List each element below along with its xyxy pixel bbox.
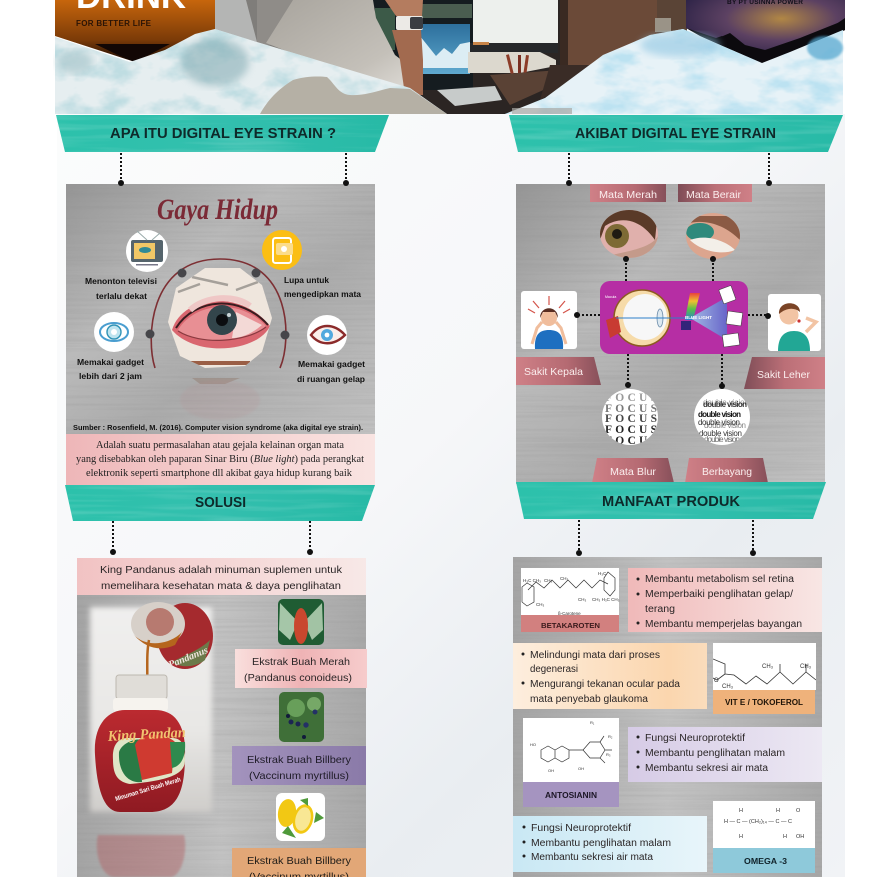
intro text box	[77, 558, 366, 595]
card: vitamin e: CH₃	[800, 664, 812, 670]
heading banner: manfaat produk	[516, 482, 826, 519]
left sea wave	[55, 29, 447, 114]
list: vitamin e benefits: Mengurangi tekanan ocular pada	[530, 679, 680, 690]
list: omega-3 benefits: Fungsi Neuroprotektif	[531, 823, 631, 834]
image: watery eye closeup	[686, 213, 740, 259]
lifestyle labels: di ruangan gelap	[297, 375, 365, 384]
card: omega-3: H	[739, 808, 743, 814]
image: focus chart: FOCUS	[605, 403, 657, 415]
image: focus chart: FOCUS	[605, 413, 657, 425]
card: headache	[521, 291, 577, 349]
definition text box: elektronik seperti smartphone dll akibat gaya hidup kurang baik	[86, 468, 353, 479]
list: omega-3 benefits	[513, 816, 707, 872]
image: double vision	[694, 389, 750, 445]
panel: manfaat produk	[513, 557, 822, 877]
list: betakaroten benefits	[628, 568, 822, 632]
lifestyle labels: Lupa untuk	[284, 276, 330, 285]
list: betakaroten benefits: terang	[645, 604, 675, 615]
card: betakaroten: CH₃ H₃C CH₃	[592, 597, 620, 602]
right starry badge	[686, 0, 845, 64]
left logo badge	[55, 0, 215, 62]
card: omega-3: H — C — (CH₂)₁₄ — C — C	[724, 819, 792, 825]
card: antosianin: R₃	[606, 752, 611, 757]
product photo: bottle pouring: Pandanus	[167, 645, 210, 671]
definition text box: Adalah suatu permasalahan atau gejala kelainan organ mata	[96, 440, 344, 451]
label: ekstrak buah merah	[235, 649, 367, 688]
product photo: bottle pouring: King Pandan	[106, 725, 186, 745]
lifestyle labels: Menonton televisi	[85, 277, 157, 286]
card: omega-3: H	[776, 808, 780, 814]
label: ekstrak buah billbery orange	[232, 848, 366, 877]
image: double vision: double vision	[704, 435, 740, 444]
icon: red eye	[307, 315, 347, 355]
card: antosianin: ANTOSIANIN	[545, 791, 597, 800]
image: focus chart: FOCUS	[605, 424, 657, 436]
heading banner: apa itu digital eye strain: APA ITU DIGITAL EYE STRAIN ?	[110, 126, 336, 142]
arc with nodes	[146, 259, 290, 368]
header photo banner	[55, 0, 845, 114]
diagram: eye and blue light: BLUE LIGHT	[685, 315, 712, 320]
list: omega-3 benefits: Membantu penglihatan malam	[531, 838, 671, 849]
label: berbayang: Berbayang	[702, 467, 752, 478]
label: mata blur: Mata Blur	[610, 467, 657, 478]
image: focus chart: FOCUS	[605, 392, 657, 404]
lifestyle labels: mengedipkan mata	[284, 290, 362, 299]
page background	[57, 114, 845, 877]
heading banner: manfaat produk: MANFAAT PRODUK	[602, 494, 741, 510]
right sea wave	[505, 29, 843, 114]
card: betakaroten	[521, 568, 620, 632]
label: sakit kepala	[516, 357, 601, 385]
image: double vision: double vision	[698, 418, 740, 427]
label: ekstrak buah billbery purple	[232, 746, 366, 785]
card: antosianin: R₁	[590, 720, 595, 725]
lifestyle labels: lebih dari 2 jam	[79, 372, 142, 381]
list: antosianin benefits: Membantu penglihatan malam	[645, 748, 785, 759]
card: betakaroten: CH₃	[536, 602, 544, 607]
list: vitamin e benefits: mata penyebab glaukoma	[530, 694, 648, 705]
label: ekstrak buah billbery purple: Ekstrak Buah Billbery	[247, 754, 352, 766]
label: sakit leher: Sakit Leher	[757, 369, 810, 381]
product photo: bottle pouring	[90, 602, 213, 877]
icon: television	[126, 230, 168, 272]
central red eye image	[168, 268, 272, 384]
list: antosianin benefits: Fungsi Neuroprotektif	[645, 733, 745, 744]
lifestyle labels: terlalu dekat	[96, 292, 147, 301]
source citation: Sumber : Rosenfield, M. (2016). Computer vision syndrome (aka digital eye strain).	[73, 423, 363, 432]
card: betakaroten: β-Carotene	[558, 611, 581, 616]
label: mata berair	[678, 184, 752, 202]
heading banner: solusi	[65, 485, 375, 521]
card: betakaroten: CH₃	[578, 597, 586, 602]
card: antosianin: R₂	[608, 734, 613, 739]
panel: gaya hidup	[66, 184, 375, 434]
icon: phone on yellow	[262, 230, 302, 270]
lifestyle labels	[77, 276, 365, 384]
card: omega-3: OH	[796, 834, 804, 840]
card: omega-3	[713, 801, 815, 873]
intro text box: memelihara kesehatan mata & daya penglihatan	[101, 580, 341, 592]
list: antosianin benefits	[628, 727, 822, 782]
card: omega-3: H	[783, 834, 787, 840]
card: vitamin e: CH₃	[722, 684, 734, 690]
card: vitamin e: VIT E / TOKOFEROL	[725, 698, 803, 707]
label: berbayang	[685, 458, 768, 483]
lifestyle labels: Memakai gadget	[298, 360, 365, 369]
definition text box: yang disebabkan oleh paparan Sinar Biru (Blue light) pada perangkat	[76, 454, 364, 465]
list: vitamin e benefits: Melindungi mata dari proses	[530, 650, 660, 661]
image: double vision: double vision	[703, 398, 749, 407]
image: red fruit	[278, 599, 324, 645]
label: mata merah	[590, 184, 666, 202]
label: sakit leher	[744, 357, 825, 389]
card: antosianin	[523, 718, 619, 807]
list: antosianin benefits: Membantu sekresi air mata	[645, 763, 768, 774]
diagram: eye and blue light	[600, 281, 748, 354]
card: betakaroten: CH₃	[544, 578, 552, 583]
tagline: FOR BETTER LIFE	[76, 19, 152, 28]
panel: solusi product	[77, 558, 367, 877]
heading banner: apa itu digital eye strain	[56, 115, 389, 152]
card: antosianin: OH	[548, 768, 554, 773]
card: antosianin: OH	[578, 766, 584, 771]
definition text box	[66, 434, 375, 485]
dotted connectors between sections	[110, 153, 772, 556]
label: mata blur	[592, 458, 674, 483]
card: omega-3: O	[796, 808, 801, 814]
card: betakaroten: H₃C CH₃	[523, 578, 541, 583]
panel: akibat symptoms	[516, 184, 825, 484]
label: ekstrak buah billbery orange: Ekstrak Buah Billbery	[247, 855, 352, 867]
list: vitamin e benefits	[513, 643, 707, 709]
diagram: eye and blue light: Macula	[605, 295, 616, 299]
card: omega-3: H	[739, 834, 743, 840]
card: vitamin e: CH₃	[762, 664, 774, 670]
icon: blue eye	[94, 312, 134, 352]
image: double vision: double vision	[699, 429, 742, 438]
card: vitamin e: O	[714, 678, 719, 684]
list: betakaroten benefits: Memperbaiki penglihatan gelap/	[645, 589, 793, 600]
product photo: bottle pouring: Minuman Sari Buah Merah	[115, 776, 182, 803]
card: omega-3: OMEGA -3	[744, 857, 788, 866]
label: sakit kepala: Sakit Kepala	[524, 366, 583, 378]
label: ekstrak buah billbery purple: (Vaccinum myrtillus)	[249, 770, 349, 782]
image: focus chart	[602, 389, 658, 447]
card: antosianin: HO	[530, 742, 536, 747]
intro text box: King Pandanus adalah minuman suplemen untuk	[100, 564, 343, 576]
lifestyle labels: Memakai gadget	[77, 358, 144, 367]
title: gaya hidup: Gaya Hidup	[157, 193, 278, 226]
heading banner: akibat digital eye strain	[509, 115, 843, 152]
label: ekstrak buah merah: (Pandanus conoideus)	[244, 672, 352, 684]
photo: office worker at monitors	[215, 0, 687, 114]
card: vitamin e	[713, 643, 816, 714]
image: double vision: double vision	[703, 400, 747, 409]
card: betakaroten: H₃C	[598, 571, 607, 576]
heading banner: akibat digital eye strain: AKIBAT DIGITAL EYE STRAIN	[575, 126, 776, 142]
image: double vision: double vision	[698, 410, 741, 419]
card: betakaroten: BETAKAROTEN	[541, 621, 600, 630]
list: omega-3 benefits: Membantu sekresi air mata	[531, 852, 653, 863]
card: betakaroten: CH₃	[560, 576, 568, 581]
heading banner: solusi: SOLUSI	[195, 495, 246, 511]
image: focus chart: FOCUS	[605, 435, 657, 447]
label: mata merah: Mata Merah	[599, 190, 657, 201]
card: neck pain	[768, 294, 821, 351]
list: betakaroten benefits: Membantu memperjelas bayangan	[645, 619, 802, 630]
label: ekstrak buah merah: Ekstrak Buah Merah	[252, 656, 350, 668]
image: lemon	[276, 793, 325, 841]
list: betakaroten benefits: Membantu metabolism sel retina	[645, 574, 794, 585]
label: mata berair: Mata Berair	[686, 190, 742, 201]
list: vitamin e benefits: degenerasi	[530, 664, 578, 675]
image: double vision: double vision	[704, 421, 746, 430]
image: bilberry	[279, 692, 324, 742]
image: red eye closeup	[600, 210, 658, 258]
